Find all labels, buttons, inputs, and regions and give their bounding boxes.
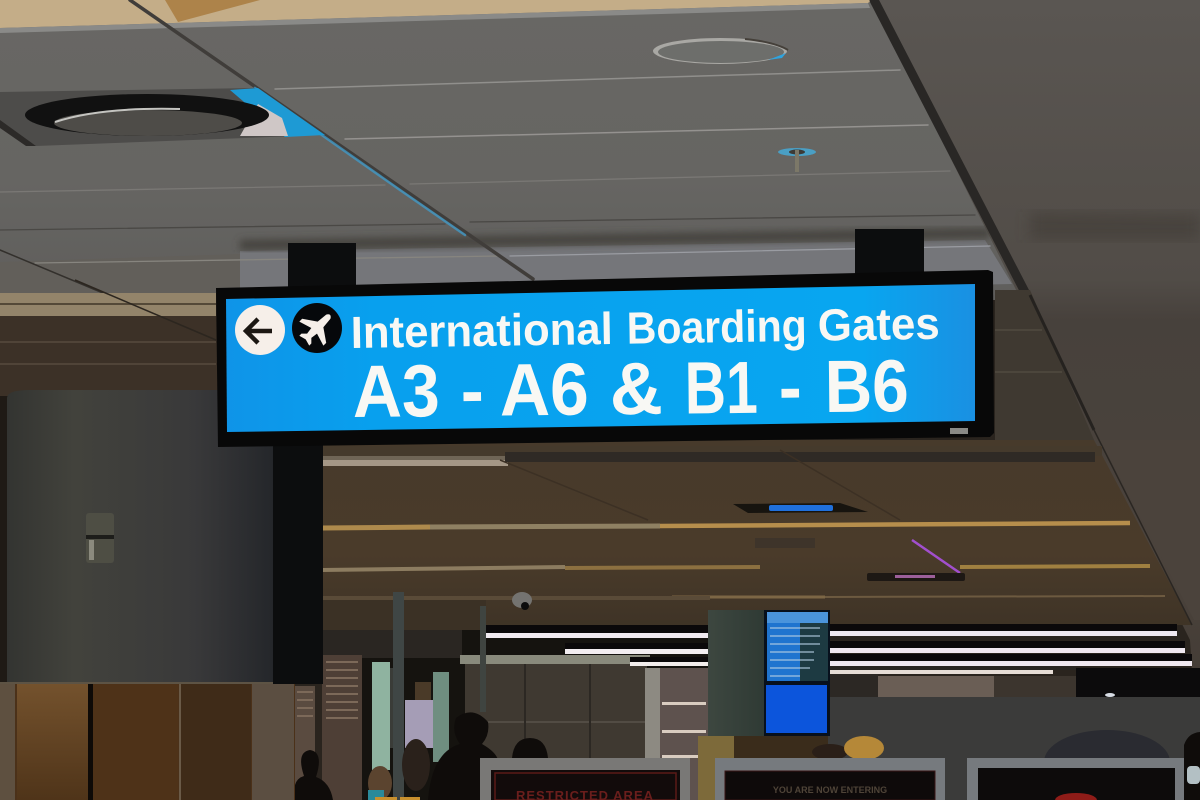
ceiling vent: round top bbox=[653, 38, 788, 64]
sign title: Boarding bbox=[626, 300, 807, 354]
support poles bbox=[393, 592, 486, 800]
ceiling shadow band bbox=[240, 212, 1200, 250]
security sign: right bbox=[967, 758, 1185, 800]
people silhouettes bbox=[295, 712, 884, 800]
security sign: entering bbox=[715, 758, 945, 800]
central pillar left bbox=[7, 390, 275, 683]
sign frame bbox=[216, 270, 994, 447]
back corridor bbox=[295, 600, 710, 800]
sign blue panel bbox=[226, 284, 975, 432]
lower ceiling area bbox=[322, 290, 1200, 630]
recessed purple light bbox=[867, 573, 965, 581]
recessed blue light bbox=[733, 503, 868, 513]
sign title: International bbox=[350, 303, 613, 358]
gate numbers: B6 bbox=[824, 344, 909, 428]
sign title bbox=[350, 298, 940, 358]
left edge back area bbox=[0, 396, 8, 686]
wall behind light strips bbox=[828, 668, 1200, 800]
pillar with screens bbox=[698, 610, 828, 800]
icon: left arrow bbox=[235, 305, 285, 355]
gate numbers: A6 bbox=[499, 348, 589, 431]
gate numbers: - bbox=[460, 349, 484, 432]
gate numbers bbox=[352, 344, 909, 433]
light strips right bbox=[827, 624, 1192, 674]
gate numbers: B1 bbox=[684, 346, 758, 430]
gate numbers: - bbox=[778, 345, 802, 429]
security camera bbox=[512, 592, 532, 610]
gate numbers: A3 bbox=[352, 349, 440, 433]
wall lamp bbox=[86, 513, 114, 563]
security sign: entering: YOU ARE NOW ENTERING bbox=[773, 785, 887, 795]
sign title: Gates bbox=[817, 298, 940, 351]
security sign: restricted area bbox=[480, 758, 690, 800]
ceiling vent: left bbox=[0, 88, 325, 146]
left upper wall bbox=[0, 280, 222, 396]
light strips left bbox=[486, 625, 709, 666]
purple reflection bbox=[912, 540, 960, 573]
sign bbox=[216, 270, 994, 447]
ceiling panel seams bbox=[0, 0, 1027, 298]
sign mounting posts bbox=[273, 229, 924, 684]
wooden base bbox=[0, 682, 295, 800]
sign maker label bbox=[950, 428, 968, 434]
flight information display bbox=[764, 610, 830, 736]
gate numbers: & bbox=[609, 347, 663, 430]
sprinkler bbox=[778, 148, 816, 172]
icon: airplane bbox=[292, 303, 342, 353]
person with mask right bbox=[1184, 732, 1200, 800]
